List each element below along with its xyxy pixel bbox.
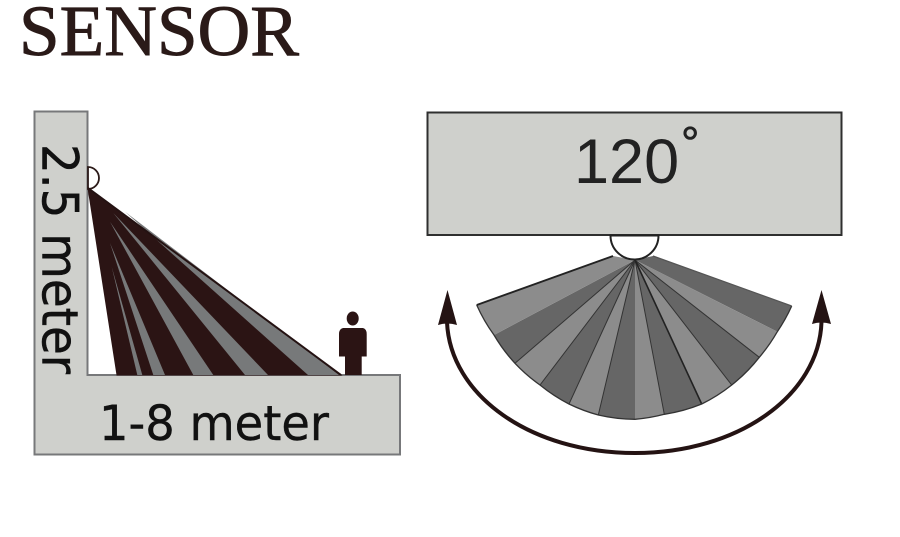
- panel: side view range: [30, 112, 400, 454]
- L-shaped wall and floor: [34, 112, 400, 454]
- label: distance: 1-8 meter: [99, 396, 329, 452]
- detection fan: [477, 256, 792, 419]
- label: degree mark: °: [681, 117, 699, 169]
- label: height: 2.5 meter: [30, 144, 88, 374]
- sensor dome top: [610, 236, 658, 260]
- panel: top view angle: [428, 112, 842, 453]
- label: angle: 120: [574, 127, 679, 197]
- ceiling box: [428, 112, 842, 235]
- arrow: sweep: [438, 290, 831, 453]
- icon: person: [339, 312, 367, 375]
- sensor dome side: [88, 167, 99, 189]
- detection beams side view: [88, 188, 341, 375]
